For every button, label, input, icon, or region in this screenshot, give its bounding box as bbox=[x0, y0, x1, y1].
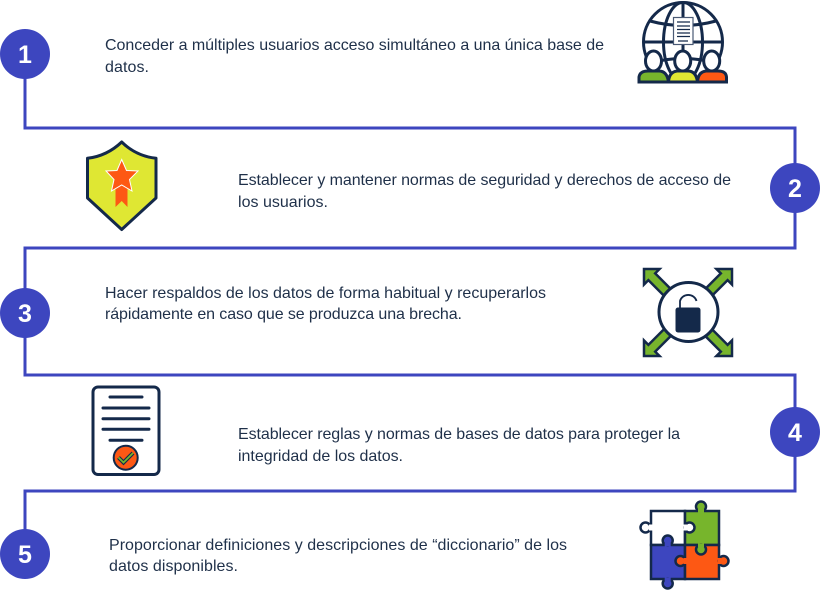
step 5 text: Proporcionar definiciones y descripciones de “diccionario” de los bbox=[109, 537, 567, 554]
step 1 text: Conceder a múltiples usuarios acceso simultáneo a una única base de bbox=[105, 37, 604, 54]
step 1 number badge: 1 bbox=[18, 41, 32, 69]
step 3 number badge bbox=[0, 288, 50, 338]
icon: shield with star ribbon bbox=[88, 142, 156, 230]
step 3 number badge: 3 bbox=[18, 300, 32, 328]
step 4 text: integridad de los datos. bbox=[238, 448, 403, 465]
step 2 number badge: 2 bbox=[788, 175, 802, 203]
step 5 text bbox=[109, 537, 567, 575]
icon: open padlock with four arrows bbox=[636, 261, 740, 364]
step 1 number badge bbox=[0, 29, 50, 79]
icon: document with check seal bbox=[93, 387, 159, 474]
step 5 number badge bbox=[0, 529, 50, 579]
step 4 number badge: 4 bbox=[788, 419, 802, 447]
step 2 text bbox=[238, 172, 731, 211]
step 2 text: Establecer y mantener normas de seguridad y derechos de acceso de bbox=[238, 172, 731, 189]
step 5 number badge: 5 bbox=[18, 541, 32, 569]
step 3 text: rápidamente en caso que se produzca una brecha. bbox=[105, 306, 462, 323]
step 4 text: Establecer reglas y normas de bases de datos para proteger la bbox=[238, 426, 680, 443]
icon: four puzzle pieces bbox=[640, 502, 728, 588]
step 2 text: los usuarios. bbox=[238, 194, 328, 211]
step 3 text: Hacer respaldos de los datos de forma habitual y recuperarlos bbox=[105, 285, 546, 302]
connector line bbox=[25, 78, 795, 530]
step 2 number badge bbox=[770, 163, 820, 213]
step 4 text bbox=[238, 426, 680, 465]
step 3 text bbox=[105, 285, 546, 323]
icon: globe with users and document bbox=[639, 2, 726, 82]
step 4 number badge bbox=[770, 407, 820, 457]
step 1 text: datos. bbox=[105, 59, 149, 76]
step 1 text bbox=[105, 37, 604, 76]
step 5 text: datos disponibles. bbox=[109, 558, 238, 575]
